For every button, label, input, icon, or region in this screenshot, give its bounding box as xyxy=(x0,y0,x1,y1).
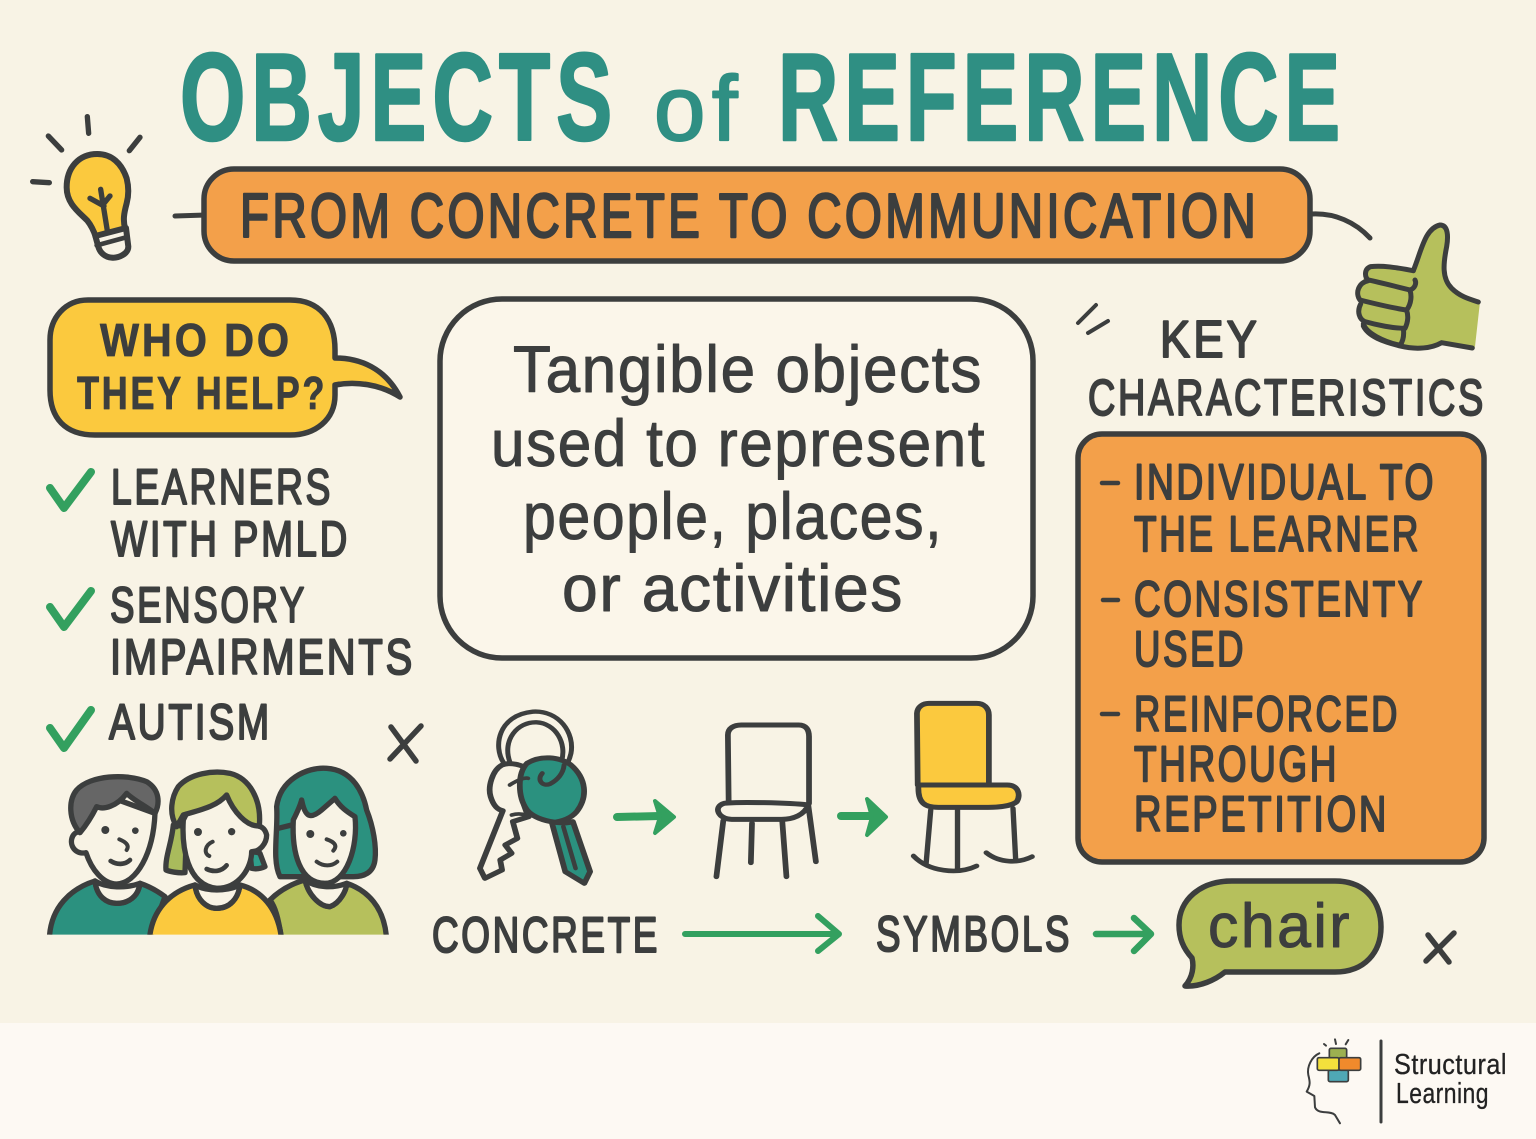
illustration: three people xyxy=(49,768,387,940)
list item: learners with PMLD: LEARNERS xyxy=(111,459,333,515)
list: who they help xyxy=(50,459,415,750)
logo icon: head with blocks xyxy=(1307,1039,1361,1123)
speech bubble: who do they help xyxy=(50,300,400,435)
logo: structural learning xyxy=(1307,1039,1507,1123)
definition box xyxy=(440,299,1033,658)
title xyxy=(180,29,1346,167)
label: symbols: SYMBOLS xyxy=(876,906,1072,962)
icon: keys xyxy=(480,712,590,883)
arrow: chair to rocking chair xyxy=(841,799,886,835)
speech bubble: chair xyxy=(1179,881,1381,986)
icon: light bulb xyxy=(33,117,140,258)
panel: characteristics xyxy=(1078,434,1484,862)
icon: yellow rocking chair xyxy=(913,703,1032,871)
list item: learners with PMLD: WITH PMLD xyxy=(111,511,350,567)
definition box: Tangible objects xyxy=(513,332,983,406)
panel: characteristics: CONSISTENTY xyxy=(1134,571,1425,627)
banner: from concrete to communication: FROM CONCRETE TO COMMUNICATION xyxy=(240,182,1259,251)
title: OBJECTS xyxy=(180,29,618,167)
icon: plain chair xyxy=(716,725,816,877)
panel: characteristics: INDIVIDUAL TO xyxy=(1134,454,1436,510)
list item: sensory impairments xyxy=(110,577,415,685)
panel: characteristics: USED xyxy=(1134,621,1246,677)
arrow: keys to chair xyxy=(617,801,674,833)
definition box: or activities xyxy=(562,551,904,625)
doodle: spark marks xyxy=(1078,305,1108,333)
arrow: concrete to symbols xyxy=(685,916,839,951)
connector right of banner xyxy=(1312,214,1370,238)
connector left of banner xyxy=(175,215,206,216)
title: of xyxy=(654,58,744,160)
heading: key characteristics xyxy=(1088,311,1486,426)
panel: characteristics: THROUGH xyxy=(1134,736,1339,792)
panel: characteristics: REINFORCED xyxy=(1134,686,1400,742)
logo text: Structural xyxy=(1394,1049,1507,1081)
doodle: x mark xyxy=(390,726,421,761)
doodle: x mark xyxy=(1426,933,1454,962)
icon: check xyxy=(50,591,91,627)
list item: autism: AUTISM xyxy=(109,694,272,750)
icon: thumbs up xyxy=(1358,225,1480,348)
icon: check xyxy=(50,472,91,508)
heading: key characteristics: KEY xyxy=(1160,311,1260,369)
banner: from concrete to communication xyxy=(204,169,1310,261)
panel: characteristics: THE LEARNER xyxy=(1134,506,1421,562)
list item: sensory impairments: IMPAIRMENTS xyxy=(110,629,415,685)
label: concrete: CONCRETE xyxy=(432,907,660,963)
logo text xyxy=(1394,1049,1507,1110)
definition box: people, places, xyxy=(523,479,943,553)
definition box: used to represent xyxy=(491,406,986,480)
logo text: Learning xyxy=(1396,1078,1489,1110)
speech bubble: chair: chair xyxy=(1208,892,1352,961)
speech bubble: who do they help: THEY HELP? xyxy=(77,367,327,419)
list item: sensory impairments: SENSORY xyxy=(110,577,307,633)
panel: characteristics: REPETITION xyxy=(1134,786,1389,842)
list item: learners with PMLD xyxy=(111,459,350,567)
arrow: symbols to word xyxy=(1096,918,1151,951)
icon: check xyxy=(50,710,91,748)
speech bubble: who do they help: WHO DO xyxy=(100,314,292,366)
logo divider xyxy=(1380,1041,1382,1122)
